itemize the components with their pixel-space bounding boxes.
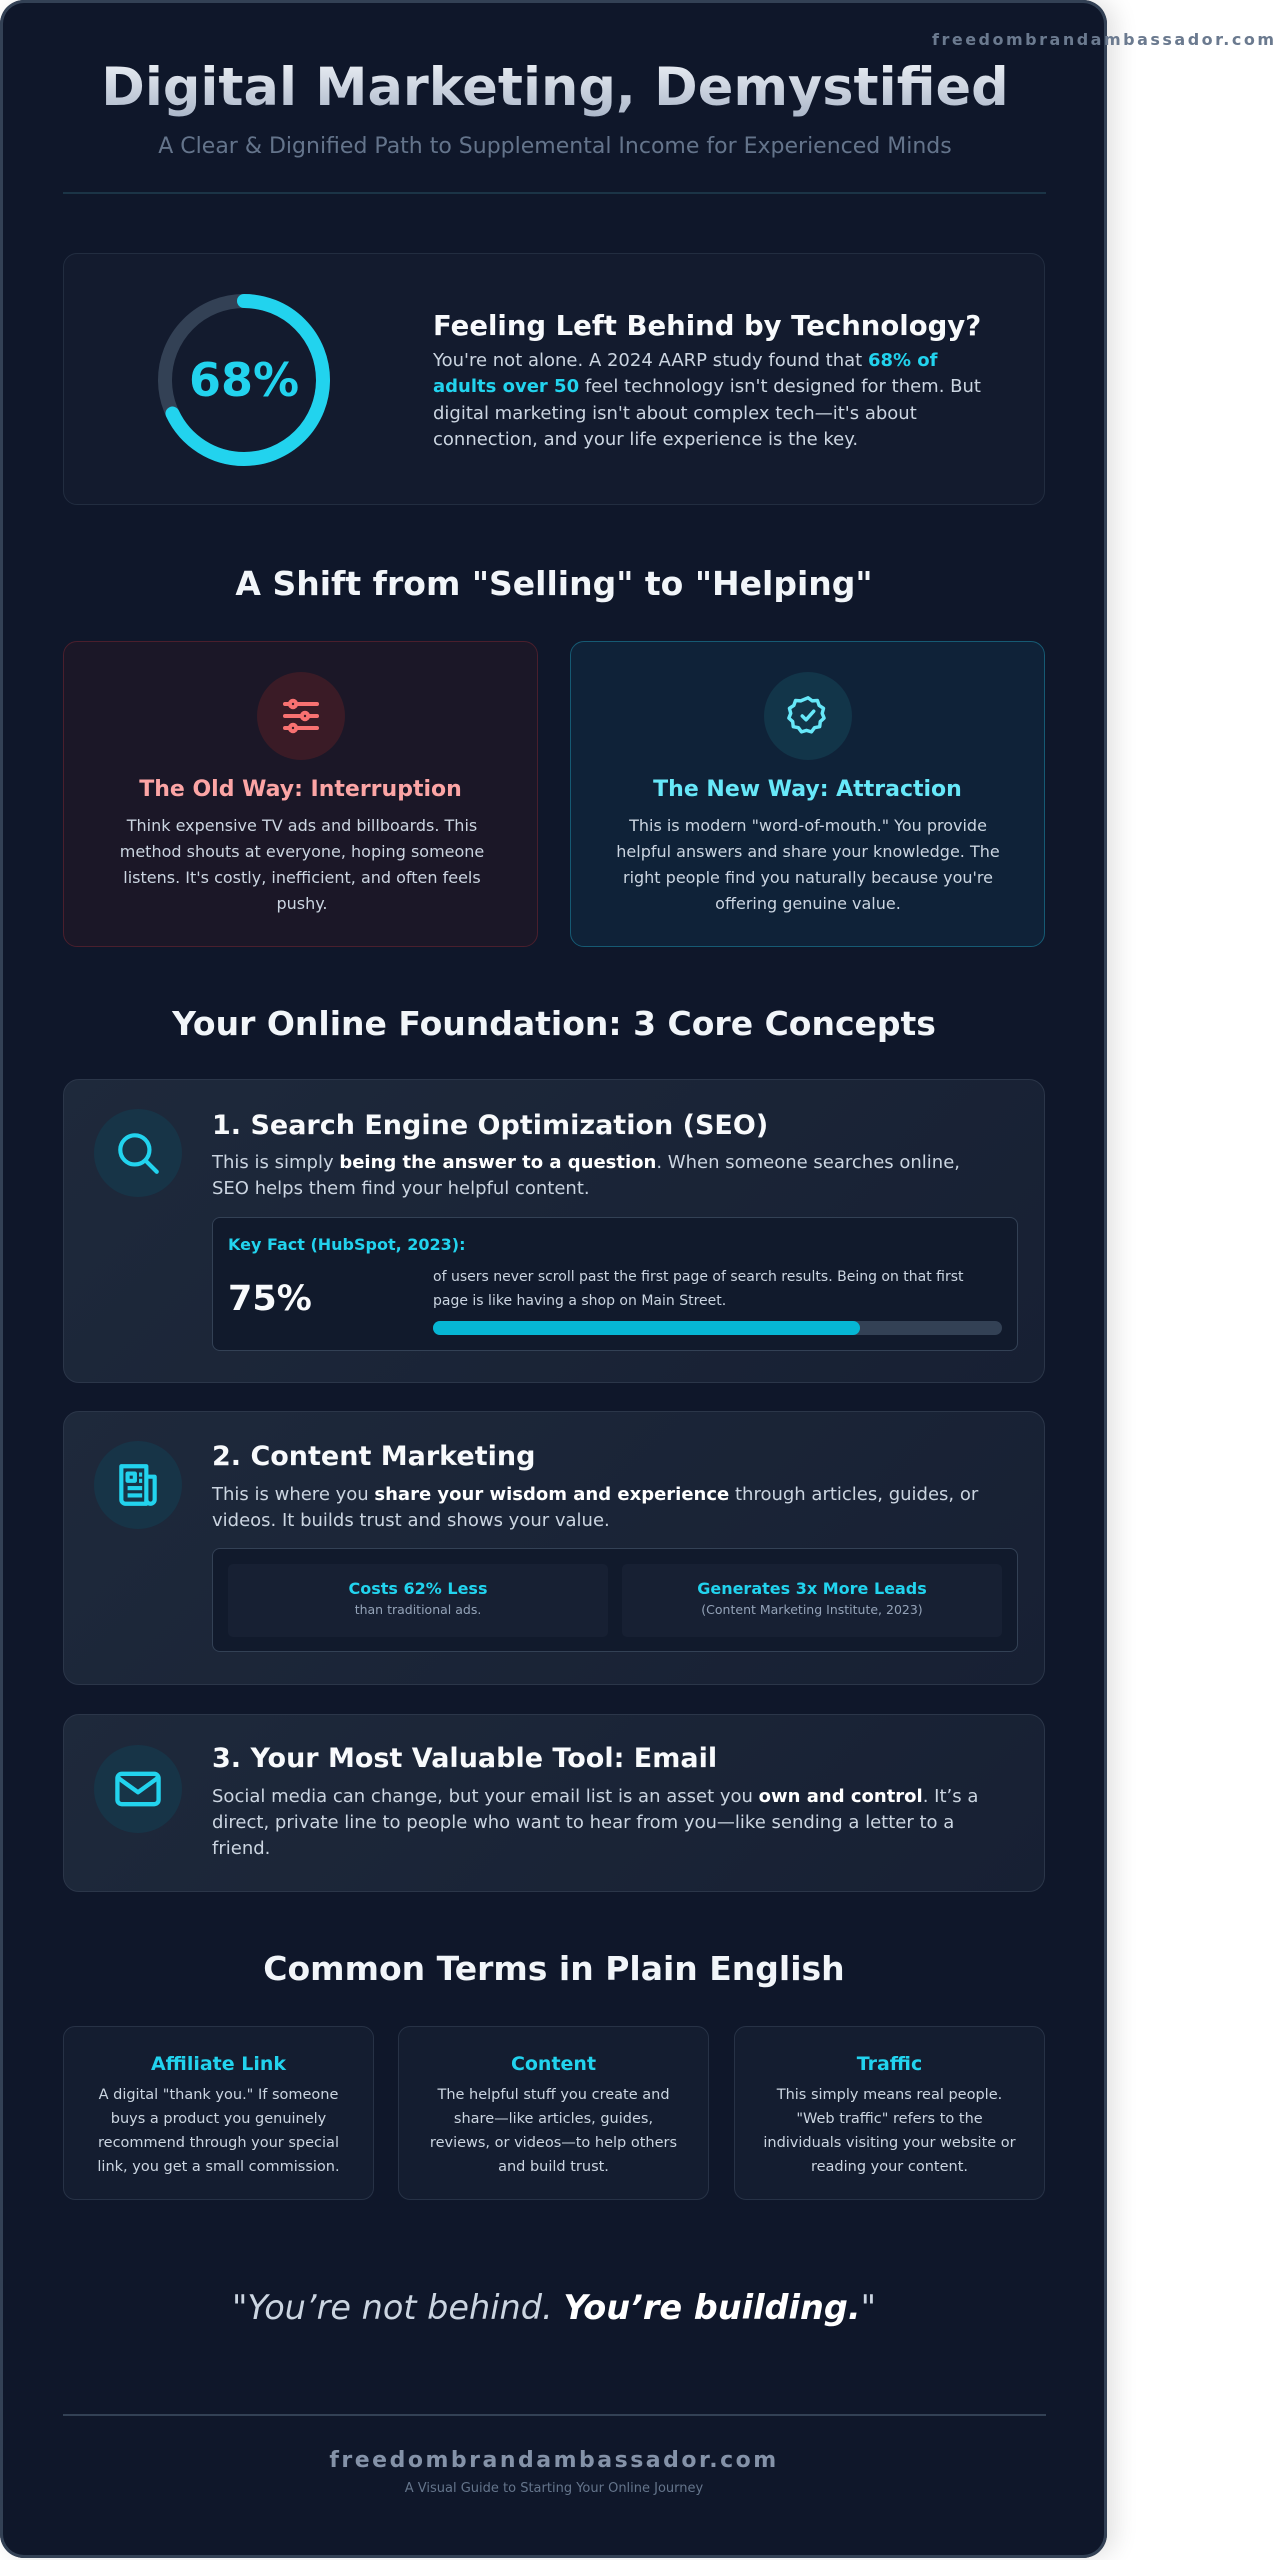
- term: content: [398, 2026, 709, 2200]
- watermark: top right: freedombrandambassador.com: [932, 30, 1276, 49]
- term: traffic: This simply means real people. "Web traffic" refers to the individuals visiting your website or reading your content.: [763, 2087, 1016, 2175]
- body: This is modern "word-of-mouth." You provide helpful answers and share your knowledge. The right people find you naturally because you're offering genuine value.: [616, 816, 1000, 913]
- chart: 68% ring: 68%: [189, 353, 299, 407]
- progress bar: [433, 1321, 1002, 1335]
- body: This is simply being the answer to a question. When someone searches online, SEO helps them find your helpful content.: [212, 1152, 960, 1199]
- stat: costs less: than traditional ads.: [355, 1602, 481, 1617]
- term: affiliate link: A digital "thank you." If someone buys a product you genuinely recommend through your special link, you get a small commission.: [97, 2087, 340, 2175]
- title: The Old Way: Interruption: [139, 777, 462, 802]
- stat: costs less: Costs 62% Less: [349, 1579, 487, 1598]
- stat: more leads: Generates 3x More Leads: [697, 1579, 927, 1598]
- body: This is where you share your wisdom and experience through articles, guides, or videos. It builds trust and shows your value.: [212, 1484, 978, 1531]
- stat 75%: 75%: [228, 1279, 312, 1319]
- stat: costs less: [228, 1564, 608, 1637]
- body: Social media can change, but your email list is an asset you own and control. It’s a direct, private line to people who want to hear from you—like sending a letter to a friend.: [212, 1786, 978, 1859]
- stats box: [212, 1548, 1018, 1652]
- term: affiliate link: Affiliate Link: [151, 2053, 286, 2075]
- stat: more leads: [622, 1564, 1002, 1637]
- footer: [329, 2448, 779, 2496]
- key fact box: of users never scroll past the first page of search results. Being on that first page is like having a shop on Main Street.: [433, 1269, 964, 1309]
- stat: more leads: (Content Marketing Institute, 2023): [701, 1602, 923, 1617]
- title: 1. Search Engine Optimization (SEO): [212, 1110, 768, 1141]
- panel: new way: [570, 641, 1045, 947]
- icon: newspaper: [94, 1441, 182, 1529]
- body: Think expensive TV ads and billboards. This method shouts at everyone, hoping someone listens. It's costly, inefficient, and often feels pushy.: [120, 816, 484, 913]
- key fact box: Key Fact (HubSpot, 2023):: [228, 1235, 466, 1254]
- quote: "You’re not behind. You’re building.": [232, 2288, 876, 2327]
- panel: feeling left behind: [63, 253, 1045, 505]
- icon: search: [94, 1109, 182, 1197]
- panel: old way: [63, 641, 538, 947]
- title: 2. Content Marketing: [212, 1441, 535, 1472]
- heading: foundation: Your Online Foundation: 3 Core Concepts: [172, 1004, 936, 1043]
- heading: Feeling Left Behind by Technology?: [433, 310, 981, 342]
- subtitle: A Clear & Dignified Path to Supplemental Income for Experienced Minds: [158, 134, 952, 159]
- icon: badge check: [764, 672, 852, 760]
- term: traffic: Traffic: [857, 2053, 922, 2075]
- footer: freedombrandambassador.com: [329, 2448, 779, 2473]
- icon: mail: [94, 1745, 182, 1833]
- title: The New Way: Attraction: [653, 777, 962, 802]
- heading: shift: A Shift from "Selling" to "Helping": [235, 564, 873, 603]
- term: affiliate link: [63, 2026, 374, 2200]
- title: 3. Your Most Valuable Tool: Email: [212, 1743, 717, 1774]
- heading: terms: Common Terms in Plain English: [263, 1949, 845, 1988]
- icon: sliders: [257, 672, 345, 760]
- term: traffic: [734, 2026, 1045, 2200]
- title: Digital Marketing, Demystified: [101, 57, 1009, 118]
- term: content: The helpful stuff you create and share—like articles, guides, reviews, or videos—to help others and build trust.: [430, 2087, 677, 2175]
- chart: 68% ring: [158, 294, 330, 466]
- panel: email: [63, 1714, 1045, 1892]
- panel: content marketing: [63, 1411, 1045, 1685]
- text block: You're not alone. A 2024 AARP study found that 68% of adults over 50 feel technology isn't designed for them. But digital marketing isn't about complex tech—it's about connection, and your life experience is the key.: [433, 350, 981, 450]
- panel: SEO: [63, 1079, 1045, 1383]
- term: content: Content: [511, 2053, 596, 2075]
- key fact box: [212, 1217, 1018, 1351]
- footer: A Visual Guide to Starting Your Online Journey: [405, 2481, 703, 2496]
